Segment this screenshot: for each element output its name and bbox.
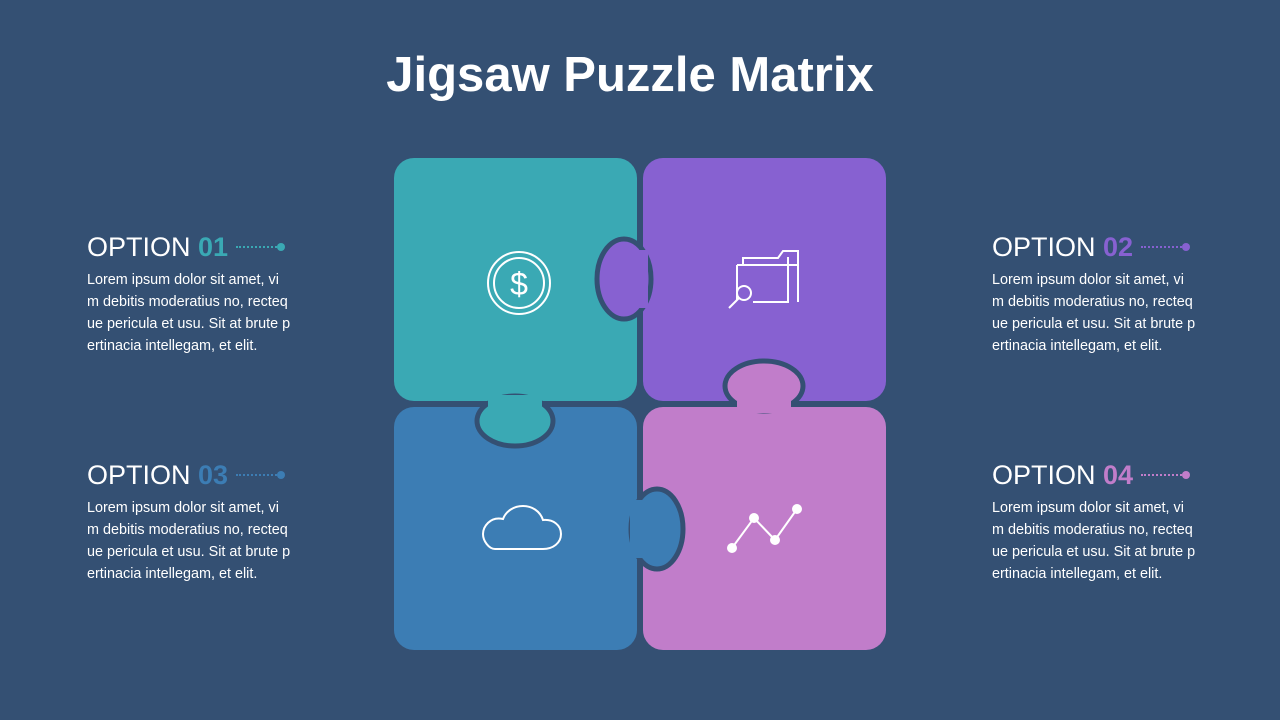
- option 02: [992, 232, 1195, 354]
- option 02: ue pericula et usu. Sit at brute p: [992, 316, 1195, 332]
- option 02: ertinacia intellegam, et elit.: [992, 338, 1162, 354]
- tab: blue into pink: [630, 489, 683, 569]
- option 03: Lorem ipsum dolor sit amet, vi: [87, 500, 279, 516]
- option 01: ertinacia intellegam, et elit.: [87, 338, 257, 354]
- option 02: Lorem ipsum dolor sit amet, vi: [992, 272, 1184, 288]
- icon: dollar coin: $: [510, 266, 528, 302]
- option 01: OPTION 01: [87, 232, 228, 262]
- option 01: ue pericula et usu. Sit at brute p: [87, 316, 290, 332]
- tab: purple into teal: [597, 239, 651, 319]
- icon: dollar coin: [488, 252, 550, 314]
- tab: teal into blue: [477, 395, 553, 446]
- option 02: m debitis moderatius no, recteq: [992, 294, 1193, 310]
- option 03: OPTION 03: [87, 460, 228, 490]
- option 04: Lorem ipsum dolor sit amet, vi: [992, 500, 1184, 516]
- option 01: [87, 232, 290, 354]
- icon: cloud: [483, 506, 561, 549]
- option 03: ertinacia intellegam, et elit.: [87, 566, 257, 582]
- title: Jigsaw Puzzle Matrix: [386, 48, 874, 102]
- piece: top right: [643, 158, 886, 401]
- option 04: ertinacia intellegam, et elit.: [992, 566, 1162, 582]
- piece: bottom right: [643, 407, 886, 650]
- option 03: [87, 460, 290, 582]
- icon: folder search: [729, 251, 798, 308]
- piece: top left: [394, 158, 637, 401]
- option 03: ue pericula et usu. Sit at brute p: [87, 544, 290, 560]
- option 04: m debitis moderatius no, recteq: [992, 522, 1193, 538]
- icon: line chart: [728, 505, 801, 552]
- option 04: [992, 460, 1195, 582]
- option 01: Lorem ipsum dolor sit amet, vi: [87, 272, 279, 288]
- option 04: OPTION 04: [992, 460, 1133, 490]
- piece: bottom left: [394, 407, 637, 650]
- tab: pink into purple: [725, 361, 803, 413]
- option 04: ue pericula et usu. Sit at brute p: [992, 544, 1195, 560]
- option 01: m debitis moderatius no, recteq: [87, 294, 288, 310]
- option 03: m debitis moderatius no, recteq: [87, 522, 288, 538]
- option 02: OPTION 02: [992, 232, 1133, 262]
